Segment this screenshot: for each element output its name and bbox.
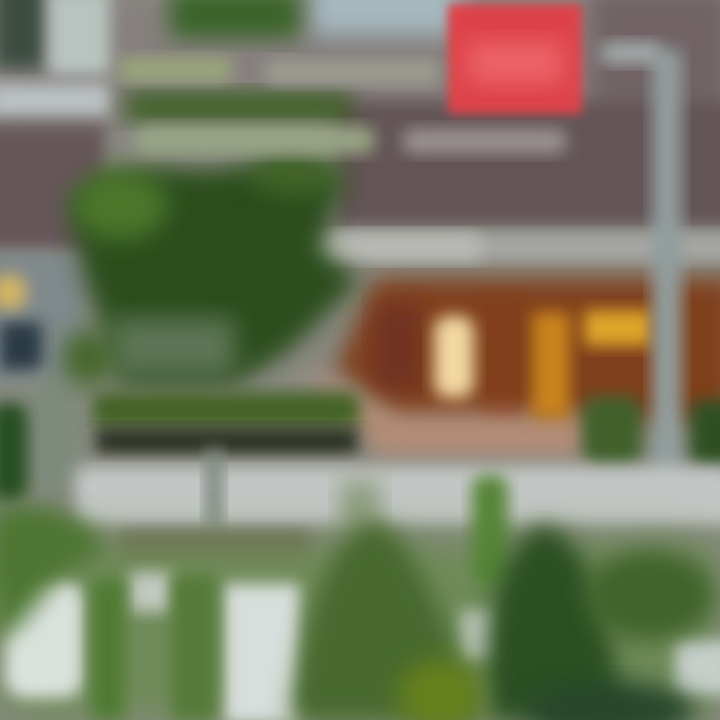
orange shopfront (300, 278, 720, 455)
blurred sign lettering (118, 57, 567, 154)
central tree (62, 0, 360, 386)
upper building and sky (0, 0, 720, 130)
white fascia (265, 234, 720, 260)
foreground plants (0, 475, 715, 720)
pavement (75, 450, 720, 568)
foreground lower ground (0, 540, 720, 720)
hedges (0, 392, 720, 502)
red sign (448, 4, 582, 114)
street pole (600, 42, 682, 490)
roof (0, 100, 720, 490)
